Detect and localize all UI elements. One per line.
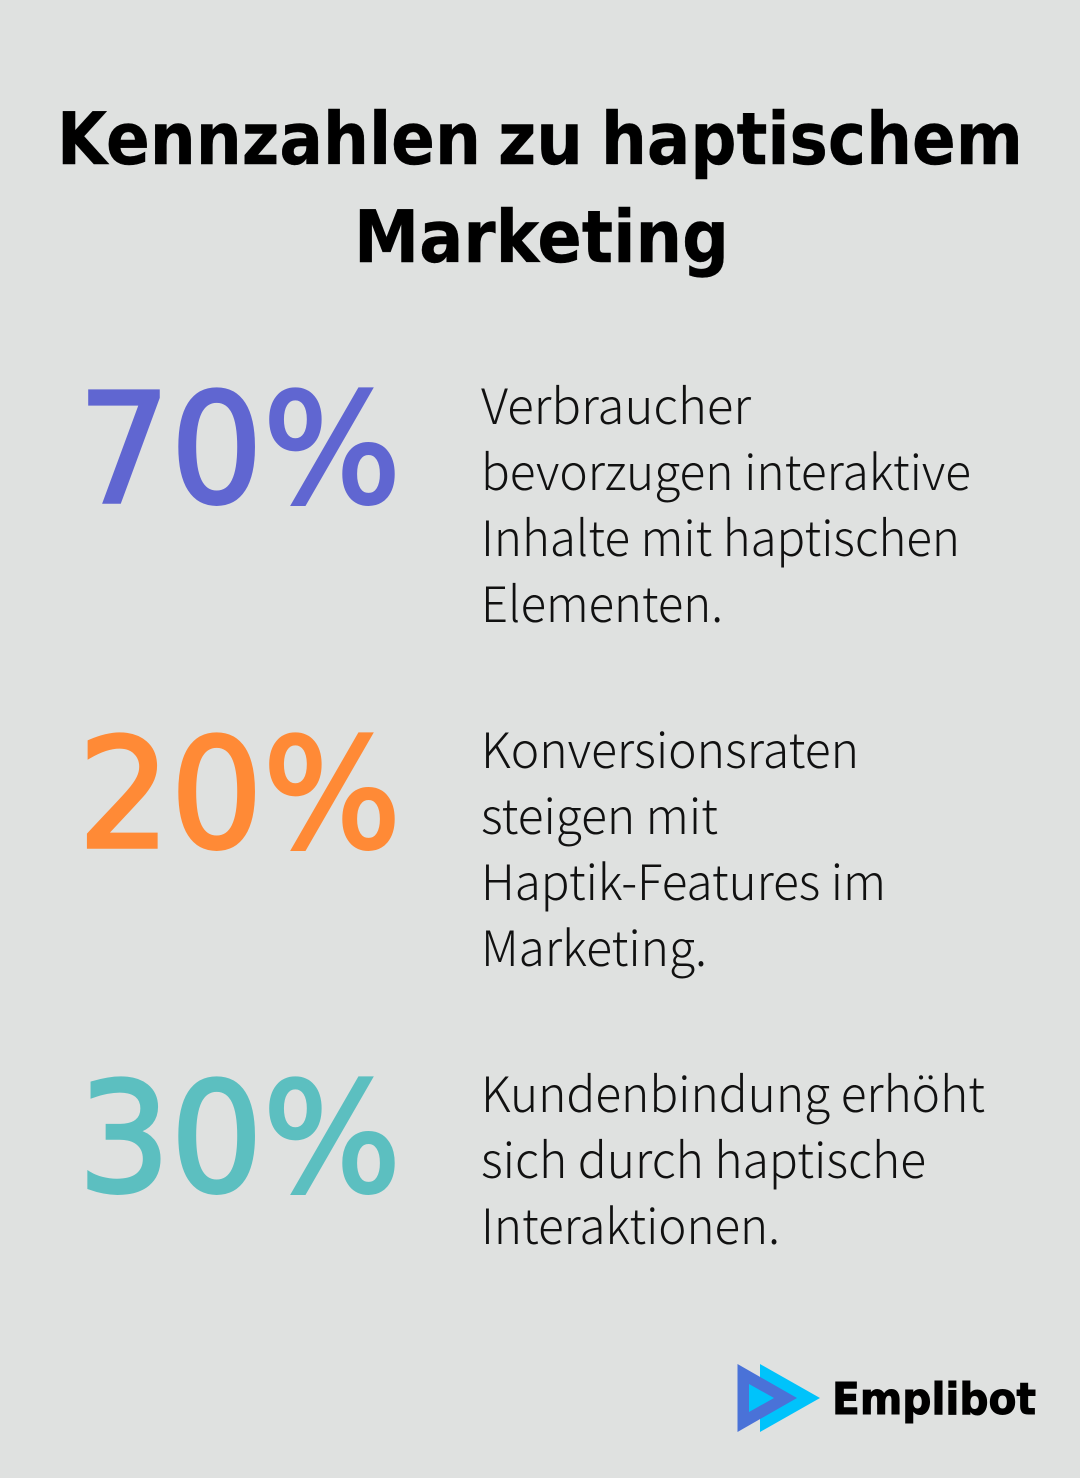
number: 70%: 70% — [78, 361, 401, 538]
title: haptischem — [601, 97, 1023, 181]
description: 30%: Interaktionen. — [481, 1188, 780, 1259]
description: 30% — [481, 1056, 985, 1259]
description: 70%: Verbraucher — [481, 368, 751, 439]
stat: 70% — [78, 361, 971, 637]
description: 20%: Haptik-Features im — [481, 844, 886, 915]
description: 20%: Marketing. — [481, 910, 707, 981]
description: 20% — [481, 712, 886, 981]
wordmark: Emplibot — [832, 1374, 1036, 1425]
description: 70%: Elementen. — [481, 566, 723, 637]
number: 20%: 20% — [78, 706, 401, 883]
title: Marketing — [354, 195, 729, 279]
title: Kennzahlen — [57, 97, 481, 181]
stat: 20% — [78, 706, 886, 981]
logo: Emplibot — [738, 1364, 1036, 1432]
title: zu — [498, 97, 583, 181]
description: 20%: Konversionsraten — [481, 712, 859, 783]
description: 20%: steigen mit — [481, 778, 718, 849]
icon: play triangles — [738, 1364, 820, 1432]
description: 70%: Inhalte mit haptischen — [481, 500, 960, 571]
stat: 30% — [78, 1050, 985, 1259]
number: 30%: 30% — [78, 1050, 401, 1227]
description: 30%: Kundenbindung erhöht — [481, 1056, 985, 1127]
title — [57, 97, 1023, 279]
description: 70%: bevorzugen interaktive — [481, 434, 971, 505]
description: 30%: sich durch haptische — [481, 1122, 926, 1193]
description: 70% — [481, 368, 971, 637]
